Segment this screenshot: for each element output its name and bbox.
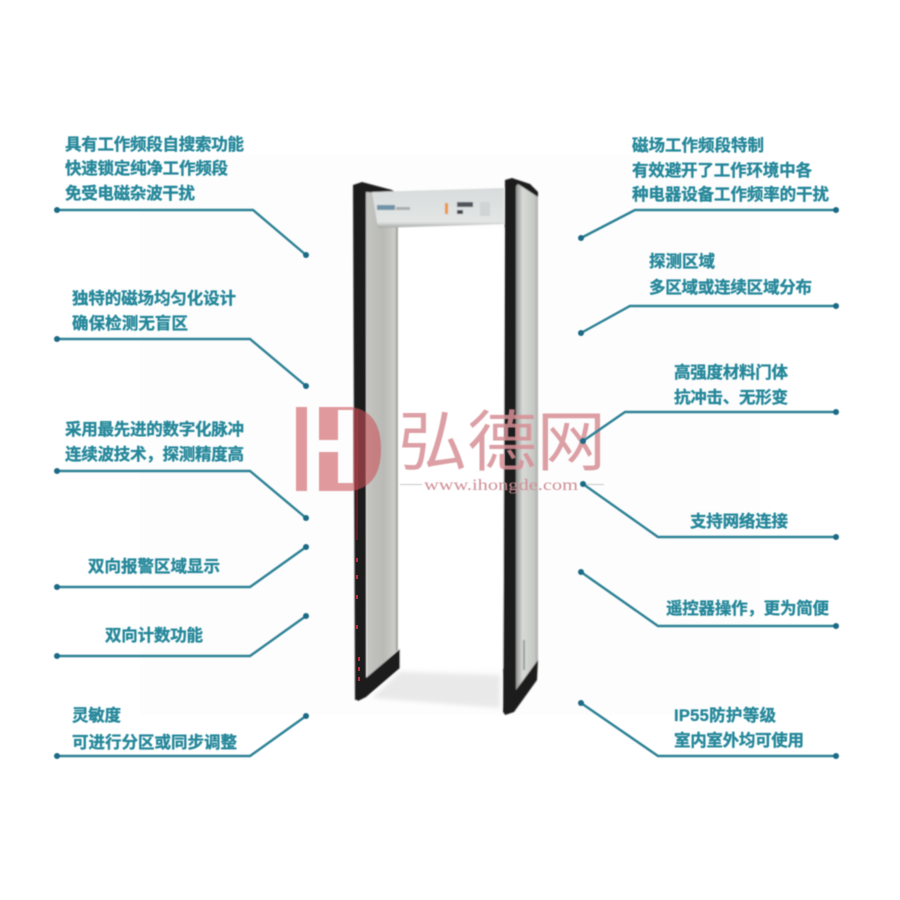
right post [503,178,538,715]
callout: detection zones: 探测区域 [649,252,716,271]
callouts right [578,135,839,759]
callout: frequency self-search [54,134,309,258]
metal detector gate [353,178,538,715]
callout: high strength material: 抗冲击、无形变 [674,387,788,407]
callout: network connection: 支持网络连接 [690,511,788,531]
watermark name: 弘德网 [398,405,606,479]
callouts left [54,134,309,759]
crossbar control unit [372,188,504,228]
callout: uniform magnetic field: 确保检测无盲区 [72,313,188,333]
alarm zone lights [356,410,360,681]
callout: bidirectional counting: 双向计数功能 [105,626,204,645]
floor shadow [372,672,500,708]
callout: high strength material [580,362,839,444]
callout: IP55 protection: 室内室外均可使用 [674,730,804,750]
callout: network connection [580,481,839,540]
callout: bidirectional alarm zones: 双向报警区域显示 [88,557,220,576]
callout: custom magnetic frequency: 有效避开了工作环境中各 [632,160,812,180]
left post [353,182,400,701]
callout: sensitivity: 可进行分区或同步调整 [72,732,238,752]
HD logo [296,407,381,491]
callout: IP55 protection: IP55防护等级 [674,705,776,725]
callout: high strength material: 高强度材料门体 [674,362,788,382]
callout: uniform magnetic field: 独特的磁场均匀化设计 [72,288,236,308]
watermark url: www.ihongde.com [424,477,579,494]
callout: digital pulse [54,419,309,521]
watermark logo [296,405,606,494]
callout: custom magnetic frequency: 种电器设备工作频率的干扰 [632,184,830,204]
callout: custom magnetic frequency: 磁场工作频段特制 [632,135,764,155]
callout: IP55 protection [578,700,839,759]
callout: bidirectional alarm zones [54,544,309,590]
callout: bidirectional counting [54,613,309,659]
callout: sensitivity [54,706,309,759]
callout: uniform magnetic field [54,288,309,389]
callout: frequency self-search: 快速锁定纯净工作频段 [65,158,228,178]
callout: sensitivity: 灵敏度 [72,706,122,725]
callout: remote control [578,569,839,629]
callout: detection zones [578,252,839,336]
callout: frequency self-search: 具有工作频段自搜索功能 [65,134,244,154]
callout: remote control: 遥控器操作，更为简便 [666,598,830,618]
callout: custom magnetic frequency [578,135,839,241]
callout: digital pulse: 连续波技术，探测精度高 [65,444,244,464]
callout: detection zones: 多区域或连续区域分布 [649,277,812,297]
opening [398,228,504,668]
callout: digital pulse: 采用最先进的数字化脉冲 [65,419,244,439]
callout: frequency self-search: 免受电磁杂波干扰 [65,184,196,203]
